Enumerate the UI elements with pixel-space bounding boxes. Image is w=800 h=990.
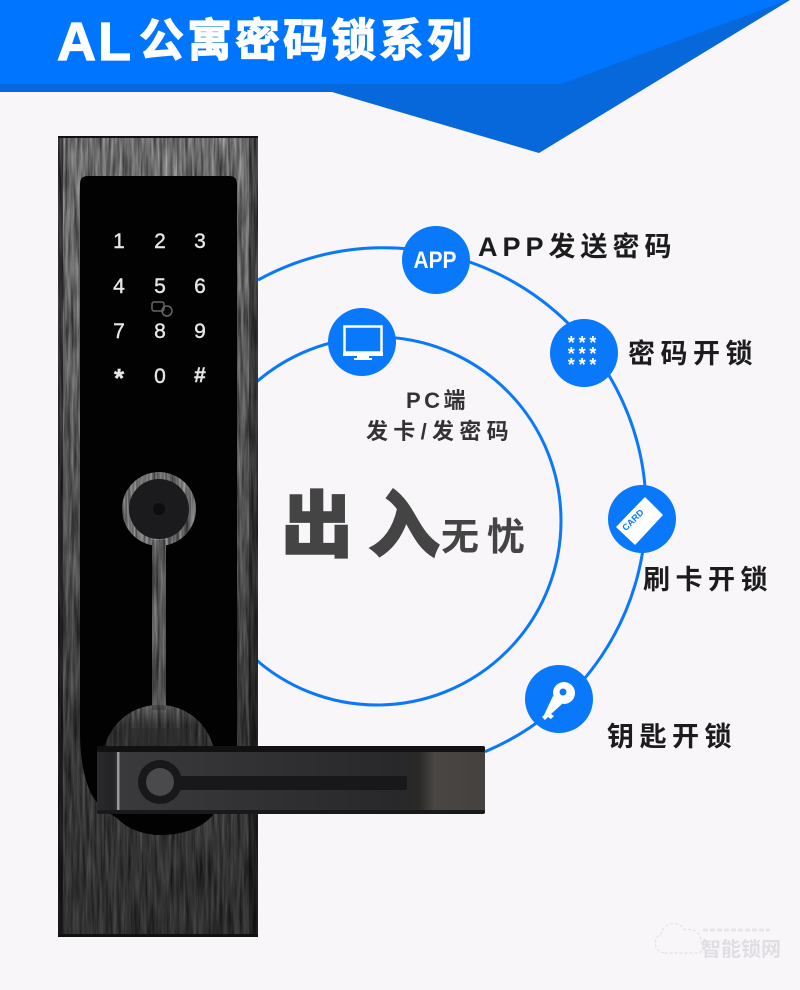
icon: card: CARD bbox=[620, 507, 646, 533]
icon: key bbox=[525, 665, 593, 733]
black glass panel bbox=[80, 176, 237, 835]
keypad digits bbox=[113, 230, 206, 393]
keypad digits: 9 bbox=[194, 320, 206, 343]
icon: card and key sensor bbox=[152, 302, 172, 316]
keypad digits: 3 bbox=[194, 230, 206, 253]
title: 公寓密码锁系列 bbox=[139, 15, 475, 66]
keypad digits: 4 bbox=[113, 275, 125, 298]
label: card unlock: 刷卡开锁 bbox=[643, 565, 773, 595]
centre slogan bbox=[281, 487, 533, 567]
icon: keypad: *** bbox=[568, 333, 600, 353]
icon: APP: APP bbox=[414, 247, 456, 274]
keypad digits: 5 bbox=[154, 275, 166, 298]
keypad digits: 8 bbox=[154, 320, 166, 343]
label: PC issuing: PC端 bbox=[406, 388, 469, 413]
centre slogan: 出 bbox=[281, 487, 353, 567]
watermark: 智能锁网 bbox=[701, 938, 781, 961]
icon: PC monitor bbox=[328, 308, 396, 376]
header banner bbox=[0, 0, 790, 153]
keypad digits: 0 bbox=[154, 365, 166, 388]
icon: keypad: *** bbox=[568, 355, 600, 375]
centre slogan: 无忧 bbox=[441, 517, 533, 559]
keypad digits: # bbox=[194, 364, 206, 387]
centre slogan: 入 bbox=[368, 487, 440, 567]
label: key unlock: 钥匙开锁 bbox=[607, 722, 737, 752]
label: PC issuing bbox=[366, 388, 514, 444]
thumb turn with neck bbox=[105, 472, 213, 746]
title bbox=[57, 12, 475, 72]
door handle bbox=[97, 746, 485, 814]
outer arc bbox=[258, 248, 646, 752]
keypad digits: * bbox=[114, 363, 125, 393]
lock product image bbox=[58, 136, 485, 937]
label: password unlock: 密码开锁 bbox=[628, 338, 758, 369]
watermark bbox=[655, 924, 781, 961]
icon: keypad: *** bbox=[568, 344, 600, 364]
keypad digits: 6 bbox=[194, 275, 206, 298]
keypad digits: 2 bbox=[154, 230, 166, 253]
door plate bbox=[58, 136, 258, 937]
icon: APP bbox=[402, 226, 470, 294]
title: AL bbox=[57, 12, 133, 72]
keypad digits: 7 bbox=[113, 320, 125, 343]
keypad digits: 1 bbox=[113, 230, 125, 253]
inner arc bbox=[193, 337, 561, 705]
icon: keypad bbox=[550, 319, 618, 387]
label: PC issuing: 发卡/发密码 bbox=[366, 419, 514, 444]
label: APP send password: APP发送密码 bbox=[478, 231, 677, 262]
icon: card bbox=[608, 485, 676, 553]
